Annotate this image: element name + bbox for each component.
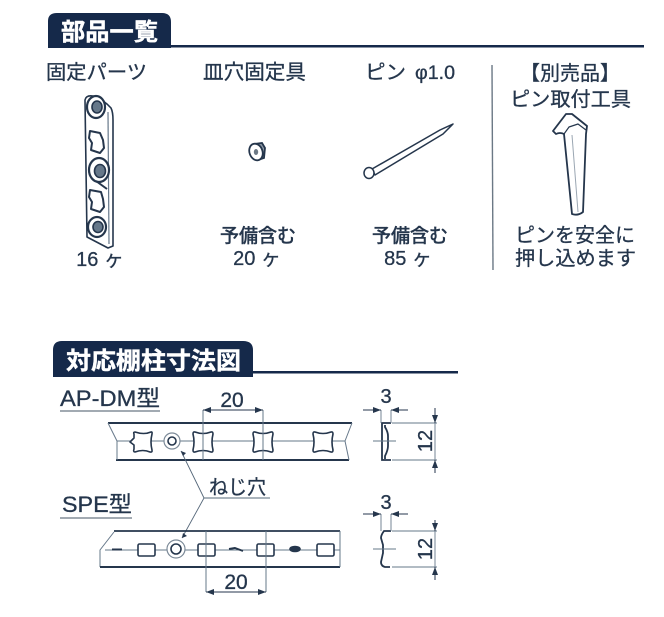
heading: parts list (48, 13, 644, 48)
heading: parts list: 部品一覧 (61, 19, 158, 46)
label: pin diameter (365, 62, 455, 84)
diagram: AP-DM rail front view (108, 423, 352, 460)
label: SPE type: SPE型 (62, 492, 132, 517)
note: fixture spare included: 予備含む (220, 225, 296, 247)
tool description: ピンを安全に (515, 224, 635, 247)
diagram: SPE rail side view: 3 (380, 492, 392, 514)
tool description: 押し込めます (515, 247, 636, 270)
icon: pin installation tool (553, 114, 587, 215)
count: pins: 85 ヶ (384, 248, 432, 270)
count: fixtures: 20 ヶ (233, 248, 281, 270)
label: pin installation tool: ピン取付工具 (510, 88, 631, 111)
dimension: AP-DM pitch 20 (203, 389, 263, 460)
label: AP-DM type: AP-DM型 (60, 386, 160, 411)
tool description (515, 224, 636, 270)
dimension: AP-DM pitch 20: 20 (220, 389, 244, 412)
divider: sold separately column (492, 65, 493, 270)
note: pin spare included: 予備含む (372, 225, 448, 247)
callout: screw hole (181, 451, 270, 538)
diagram: SPE rail side view: 12 (415, 538, 437, 560)
icon: pin (364, 124, 453, 178)
diagram: SPE rail side view (363, 492, 437, 580)
label: fixing parts: 固定パーツ (46, 61, 147, 84)
diagram: SPE rail front view (100, 531, 340, 567)
heading: compatible shelf post dimensions (53, 341, 458, 377)
diagram: AP-DM rail side view: 3 (380, 386, 392, 408)
label: countersunk fixture: 皿穴固定具 (203, 61, 306, 84)
icon: fixing part (85, 96, 113, 248)
label: sold separately: 【別売品】 (520, 62, 620, 85)
count: fixing parts: 16 ヶ (76, 249, 124, 271)
diagram: AP-DM rail side view (363, 386, 437, 473)
dimension: SPE pitch 20: 20 (224, 571, 248, 594)
diagram: AP-DM rail side view: 12 (415, 430, 437, 452)
label: pin diameter: ピン (365, 62, 406, 84)
callout: screw hole: ねじ穴 (209, 476, 266, 499)
dimension: SPE pitch 20 (206, 531, 266, 594)
heading: compatible shelf post dimensions: 対応棚柱寸法図 (66, 348, 241, 375)
label: pin diameter: φ1.0 (415, 63, 455, 84)
icon: countersunk fixture (247, 142, 265, 162)
